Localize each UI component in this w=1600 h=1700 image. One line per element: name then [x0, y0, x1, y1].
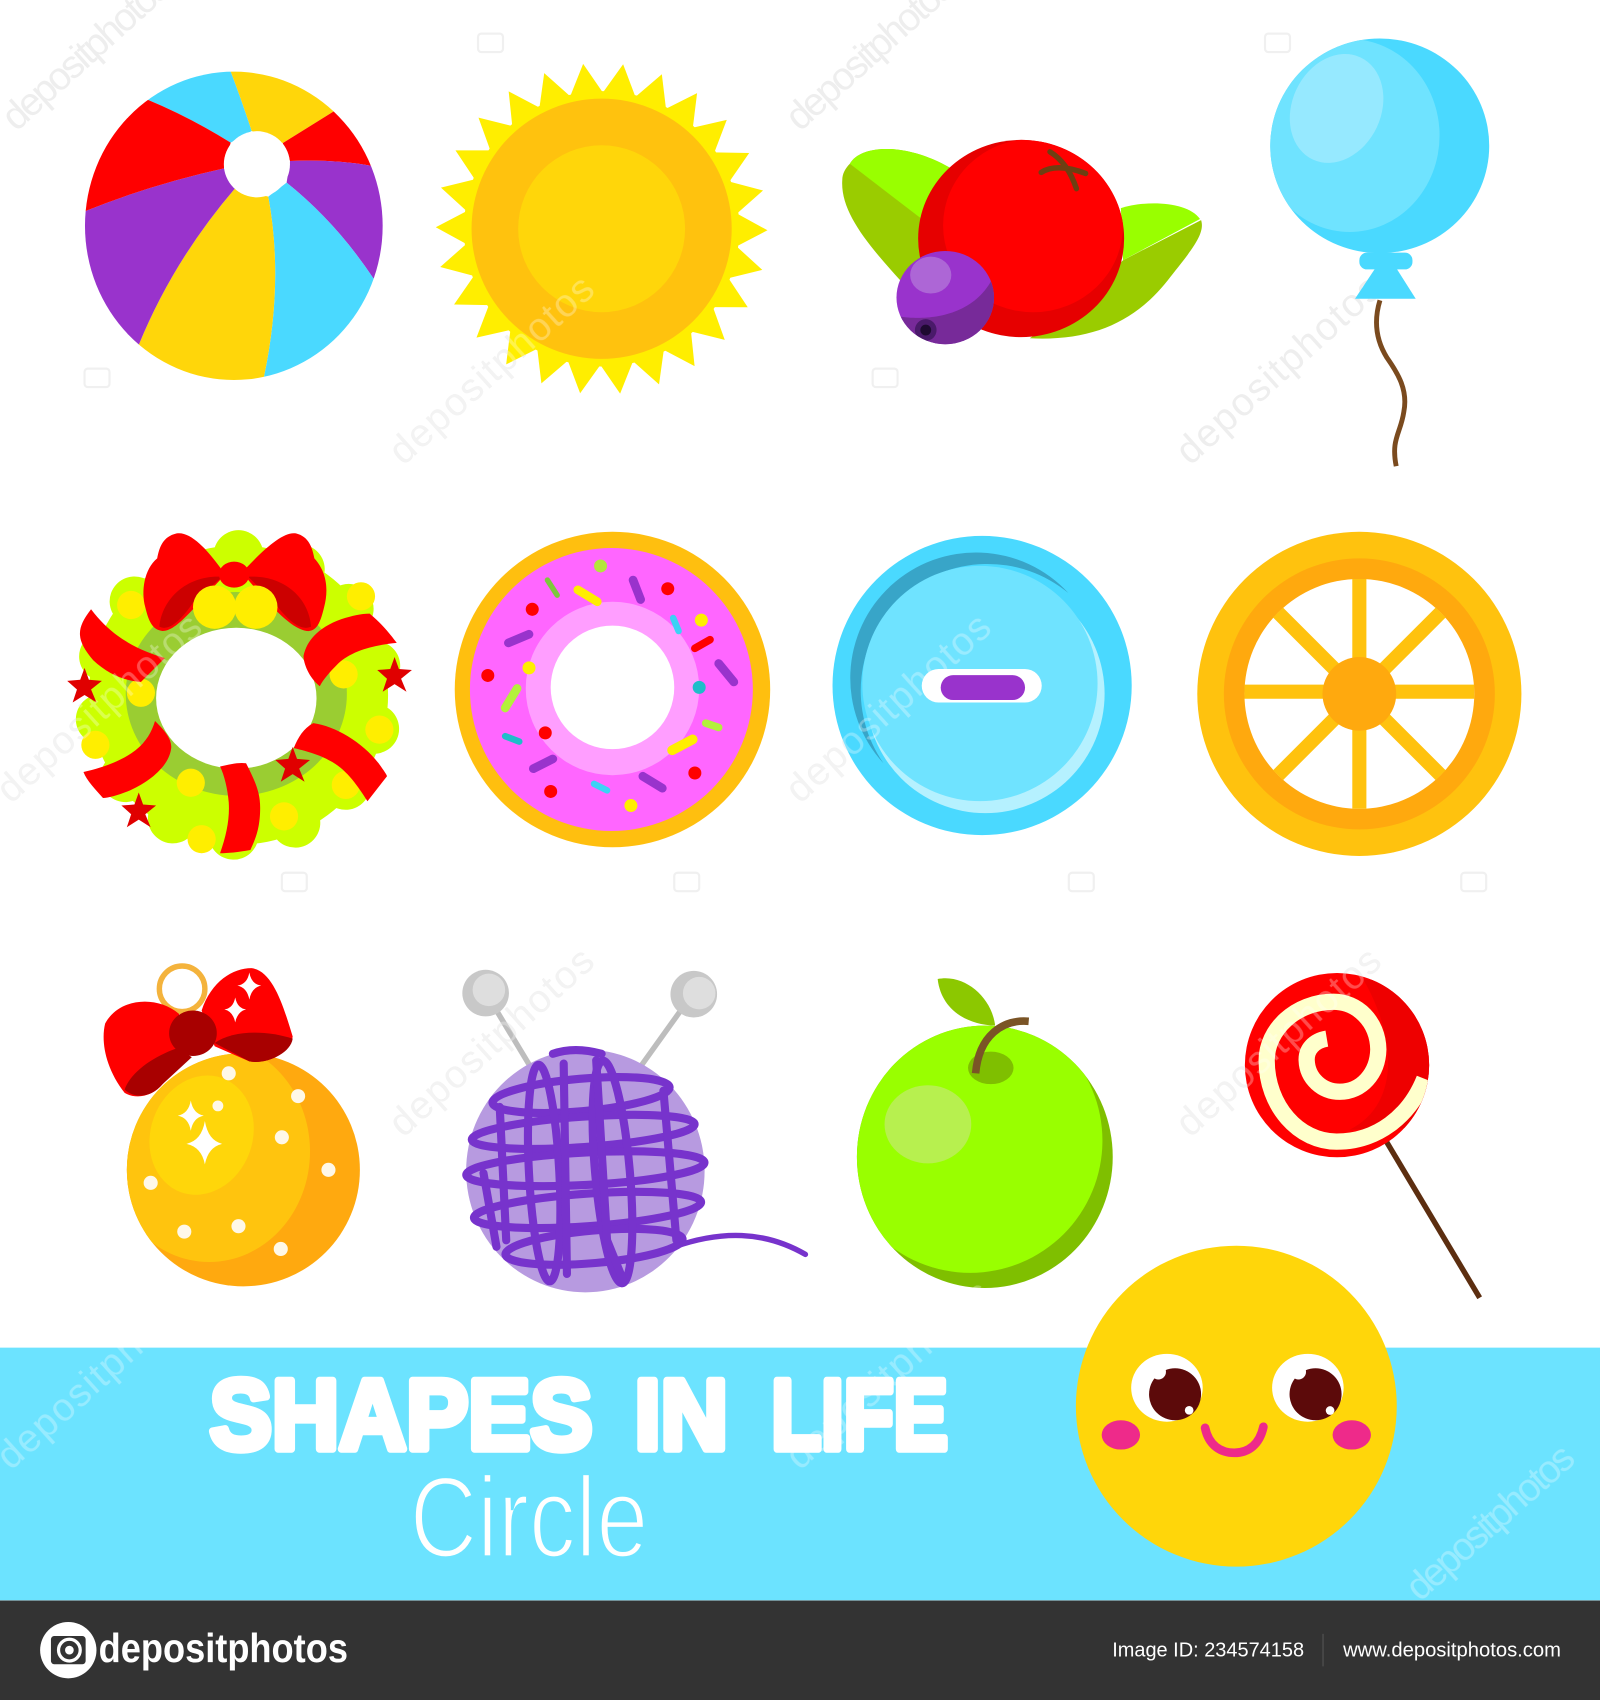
watermarks over artwork: depositphotos: [1167, 939, 1390, 1145]
watermarks on white: depositphotos: [1167, 939, 1390, 1145]
image id: Image ID: 234574158: [1112, 1639, 1304, 1662]
donut dough: [455, 532, 770, 847]
yarn tail: [674, 1235, 805, 1254]
sun rays: [418, 45, 786, 412]
knitting needles: [462, 970, 717, 1068]
icon: yarn ball with needles: [462, 970, 805, 1292]
footer divider: [1322, 1634, 1324, 1666]
button rim: [833, 536, 1132, 835]
watermarks over artwork: depositphotos: [381, 939, 603, 1145]
button bevel shadow: [850, 552, 1068, 763]
title: LIFE: [771, 1360, 948, 1471]
watermarks on white: depositphotos: [381, 267, 603, 473]
cheeks: [1102, 1420, 1371, 1450]
balloon knot: [1355, 253, 1416, 299]
camera icon: [40, 1622, 96, 1678]
apple body: [856, 1026, 1113, 1288]
blue berry: [896, 251, 994, 344]
button face: [862, 566, 1098, 801]
watermarks over artwork: depositphotos: [777, 1272, 999, 1478]
title: SHAPES: [210, 1360, 592, 1471]
icon: christmas wreath: [67, 530, 412, 861]
button slot: [922, 669, 1042, 703]
watermarks on white: depositphotos: [777, 605, 999, 811]
face: [1076, 1246, 1397, 1567]
right eye: [1272, 1354, 1344, 1422]
wreath berries: [81, 582, 393, 853]
footer bar: [0, 1600, 1600, 1700]
wheel rim: [1197, 532, 1521, 856]
icon: button: [833, 536, 1132, 835]
wreath inner ring: [126, 592, 347, 796]
subtitle: Circle: [410, 1454, 648, 1582]
left leaf: [842, 149, 954, 287]
wheel hub: [1322, 657, 1396, 731]
button bevel light: [866, 575, 1105, 813]
wreath stars: [67, 657, 412, 827]
yarn ball: [466, 1049, 705, 1292]
wordmark: depositphotos: [99, 1625, 348, 1671]
title: IN: [635, 1360, 728, 1471]
ornament bow: [104, 968, 293, 1096]
lollipop stick: [1386, 1142, 1480, 1298]
balloon string: [1377, 300, 1405, 466]
watermarks over artwork: depositphotos: [1397, 1436, 1583, 1609]
watermarks on white: [0, 0, 1486, 1145]
lollipop candy: [1244, 973, 1430, 1158]
watermarks on white: depositphotos: [381, 939, 603, 1145]
mouth: [1205, 1427, 1263, 1453]
apple stem: [976, 1021, 1029, 1073]
yarn strands: [465, 1050, 705, 1285]
wreath bow: [143, 533, 326, 631]
title: [210, 1360, 948, 1471]
icon: green apple: [838, 978, 1117, 1290]
wheel spokes: [1244, 579, 1474, 809]
donut sprinkles: [505, 580, 734, 790]
balloon body: [1260, 38, 1491, 260]
website: www.depositphotos.com: [1342, 1639, 1561, 1662]
icon: donut: [455, 532, 770, 847]
ornament sparkles: [178, 1100, 222, 1164]
watermarks over artwork: depositphotos: [381, 267, 603, 473]
right leaf: [1030, 203, 1202, 339]
banner strip: [0, 1348, 1600, 1600]
icon: beach ball: [85, 72, 383, 380]
footer logo: [40, 1622, 348, 1678]
ornament ring: [159, 966, 205, 1012]
watermarks on white: depositphotos: [1167, 267, 1390, 473]
left eye: [1131, 1354, 1203, 1422]
sun disc: [472, 99, 732, 359]
icon: sun: [418, 45, 786, 412]
ornament dots: [144, 1066, 336, 1256]
icon: wagon wheel: [1197, 532, 1521, 856]
apple leaf: [938, 978, 995, 1026]
watermarks over artwork: [0, 267, 1583, 1609]
ornament ball: [126, 1054, 360, 1286]
watermarks over artwork: depositphotos: [777, 605, 999, 811]
wreath foliage: [72, 530, 405, 861]
red berry: [911, 136, 1127, 342]
donut icing: [470, 548, 753, 831]
icon: lollipop: [1241, 970, 1480, 1298]
icon: balloon: [1260, 38, 1491, 466]
icon: christmas ornament: [104, 966, 363, 1290]
icon: berries and leaves: [842, 136, 1202, 347]
wreath ribbons: [80, 609, 397, 853]
character: smiling circle: [1076, 1246, 1397, 1567]
